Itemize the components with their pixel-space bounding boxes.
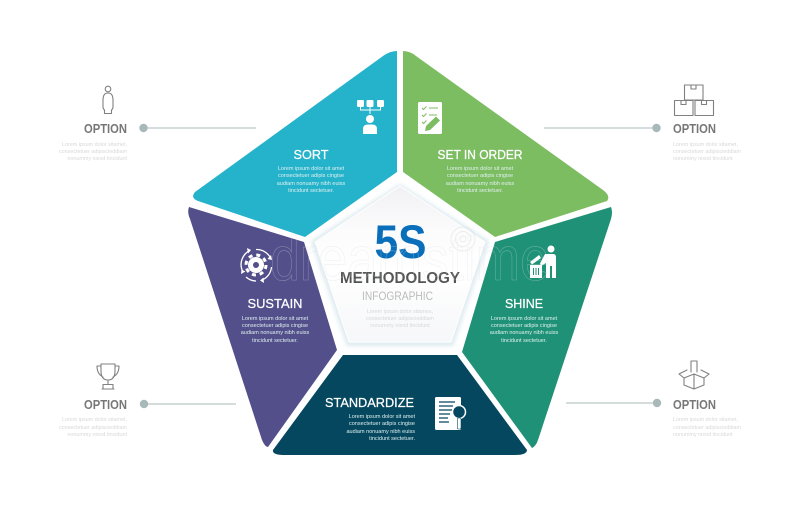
icon: person outline [103,86,113,114]
icon: stacked boxes [674,85,714,116]
shine wedge [462,207,612,448]
label: option: OPTION [673,122,716,136]
icon: checklist with pencil [418,102,442,134]
icon: gear with cycle arrows [241,248,272,283]
connector [140,400,236,408]
outer white pentagon [304,177,496,353]
option: bottom right [566,361,742,438]
inner gradient pentagon [315,186,485,342]
text: option description: Lorem ipsum dolor sitamet, [62,417,127,423]
panel: sort [193,51,397,237]
heading: set in order: SET IN ORDER [438,147,522,162]
text: shine description: consectetuer adipis cingise [491,323,557,329]
text: standardize description: audiam nonuamy nibh euiss [346,429,415,435]
text: set in order description: audiam nonuamy nibh euiss [446,181,514,187]
text: option description: consectetuer adipiscieddiam [59,149,127,155]
text: set in order description: tincidunt sectetuer. [457,188,503,194]
watermark: dreamstime [270,225,550,294]
panel: sustain [188,207,337,447]
text: sustain description: Lorem ipsum dolor sit amet [242,316,309,322]
text: option description: nonummy nixod tincidunt [67,156,127,162]
label: option: OPTION [84,122,127,136]
subtitle: infographic: INFOGRAPHIC [362,289,433,303]
text: standardize description: tincidunt sectetuer. [369,436,415,442]
label: option: OPTION [84,398,127,412]
icon: document with magnifier [435,397,466,430]
text: shine description: audiam nonuamy nibh euiss [490,330,558,336]
heading: sort: SORT [294,147,329,162]
text: standardize description: Lorem ipsum dolor sit amet [349,414,415,420]
text: set in order description [446,166,514,194]
text: set in order description: Lorem ipsum dolor sit amet [447,166,514,172]
heading: sustain: SUSTAIN [248,296,302,311]
text: center description: nonummy nixod tincidunt [370,323,430,329]
text: sort description: audiam nonuamy nibh euiss [277,181,345,187]
panel: set in order [403,51,608,237]
text: set in order description: consectetuer adipis cingise [447,173,513,179]
text: standardize description [346,414,415,442]
text: option description: Lorem ipsum dolor sitamet, [673,142,739,148]
sustain wedge [188,207,337,447]
text: option description [673,417,742,438]
connector [544,124,661,132]
connector [139,124,256,132]
text: sort description: tincidunt sectetuer. [288,188,334,194]
option: bottom left [59,364,236,438]
connector [566,399,661,407]
text: sort description: Lorem ipsum dolor sit amet [278,166,345,172]
text: option description [59,142,127,162]
text: option description: nonummy nixod tincidunt [673,156,733,162]
text: sort description [277,166,345,194]
text: option description [673,142,742,162]
icon: hierarchy with person [357,100,384,134]
heading: standardize: STANDARDIZE [325,395,414,410]
icon: trophy [97,364,119,389]
text: shine description: Lorem ipsum dolor sit amet [491,316,558,322]
icon: person using trash bin [530,246,556,278]
standardize wedge [273,355,527,455]
text: sustain description: audiam nonuamy nibh euiss [241,330,309,336]
text: option description: nonummy nixod tincidunt [673,432,733,438]
text: sustain description [241,316,309,344]
heading: shine: SHINE [505,296,543,311]
text: option description: consectetuer adipiscieddiam [673,425,742,431]
label: option: OPTION [673,398,716,412]
text: option description: consectetuer adipiscieddiam [59,425,127,431]
text: option description: consectetuer adipiscieddiam [673,149,742,155]
text: sustain description: tincidunt sectetuer. [252,338,298,344]
text: center description: Lorem ipsum dolor sitames, [367,309,434,315]
text: sort description: consectetuer adipis cingise [278,173,344,179]
panel: standardize [273,355,527,455]
title: 5S: 5S [374,215,426,268]
sort wedge [193,51,397,237]
title: methodology: METHODOLOGY [340,270,461,287]
text: center description: consectetuer adipiscieddiam [366,316,435,322]
icon: open box [679,361,709,389]
text: center description [366,309,435,329]
text: shine description: tincidunt sectetuer. [501,338,547,344]
set in order wedge [403,51,608,237]
text: sustain description: consectetuer adipis cingise [242,323,308,329]
option: top left [59,86,256,162]
option: top right [544,85,742,162]
text: standardize description: consectetuer adipis cingise [349,421,415,427]
panel: center pentagon [304,177,496,353]
text: option description: Lorem ipsum dolor sitamet, [673,417,739,423]
text: shine description [490,316,558,344]
panel: shine [462,207,612,448]
text: option description [59,417,127,438]
text: option description: Lorem ipsum dolor sitamet, [62,142,127,148]
text: option description: nonummy nixod tincidunt [67,432,127,438]
